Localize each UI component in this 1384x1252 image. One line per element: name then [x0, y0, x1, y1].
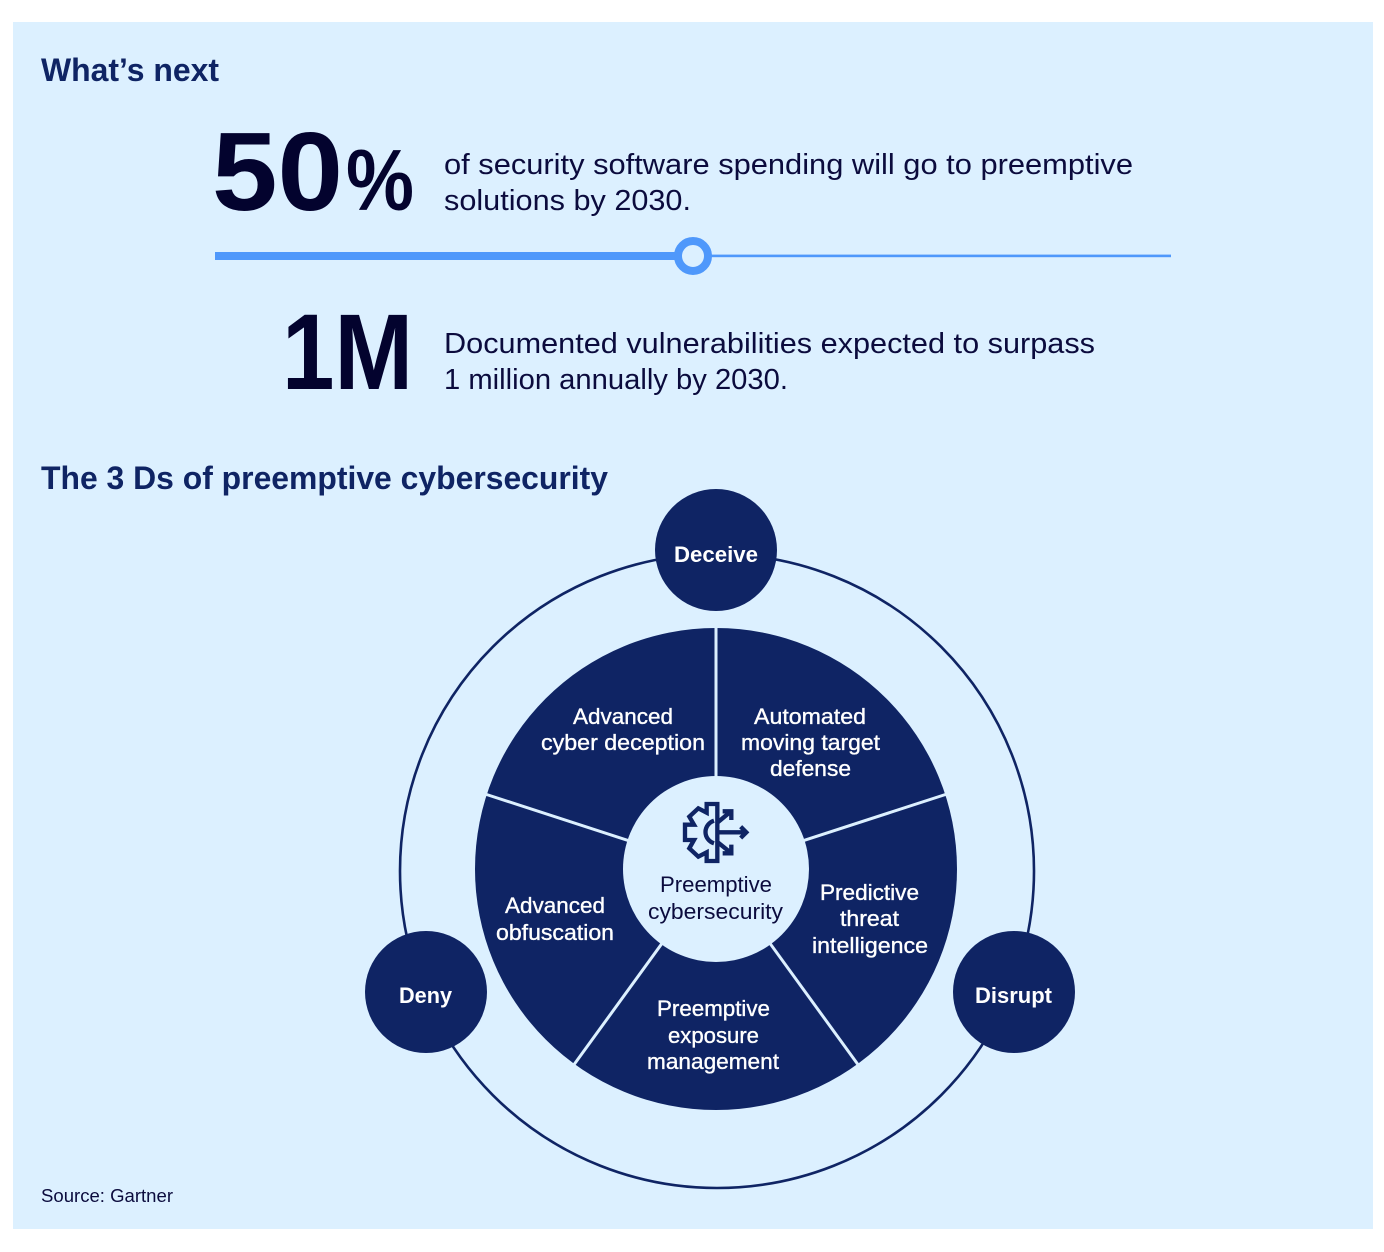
text: 50% description: solutions by 2030. — [444, 185, 691, 217]
label: Preemptive exposure management: Preemptive — [657, 996, 770, 1021]
stat: 50%: % — [346, 133, 414, 229]
label: Preemptive exposure management: exposure — [668, 1023, 759, 1048]
outer ring — [400, 554, 1034, 1188]
heading: What's next: What’s next — [41, 52, 219, 88]
label: center: Preemptive — [660, 872, 772, 897]
source note: Source: Gartner — [41, 1186, 173, 1206]
label: Predictive threat intelligence: Predictive — [820, 880, 919, 905]
node: Disrupt — [953, 931, 1075, 1053]
label: Automated moving target defense: moving target — [741, 730, 880, 755]
center circle — [623, 776, 809, 962]
label: Predictive threat intelligence — [812, 880, 928, 958]
text: 50% description — [444, 149, 1133, 217]
node: Deny — [365, 931, 487, 1053]
label: Advanced obfuscation: Advanced — [505, 893, 605, 918]
label: Preemptive exposure management — [647, 996, 779, 1074]
heading: The 3 Ds: The 3 Ds of preemptive cybersecurity — [41, 460, 608, 496]
stat: 1M: 1M — [282, 291, 413, 412]
text: 1M description: Documented vulnerabilities expected to surpass — [444, 328, 1095, 360]
label: center: cybersecurity — [648, 899, 783, 924]
label: Automated moving target defense: Automated — [754, 704, 866, 729]
text: 1M description: 1 million annually by 2030. — [444, 364, 788, 396]
label: Predictive threat intelligence: intelligence — [812, 933, 928, 958]
pie: five capabilities — [475, 626, 957, 1110]
node: Disrupt: Disrupt — [975, 983, 1053, 1008]
diagram: 3 Ds wheel — [365, 489, 1075, 1188]
stat: 50%: 50 — [212, 110, 343, 234]
label: Advanced cyber deception: Advanced — [573, 704, 673, 729]
label: Automated moving target defense: defense — [770, 756, 851, 781]
text: 1M description — [444, 328, 1095, 396]
stat: 50% — [212, 110, 414, 234]
node: Deny: Deny — [399, 983, 453, 1008]
node: Deceive — [655, 489, 777, 611]
icon: gear with arrows — [685, 804, 746, 861]
slider: progress line with marker — [215, 241, 1171, 271]
label: center — [648, 872, 783, 924]
node: Deceive: Deceive — [674, 542, 758, 567]
label: Advanced cyber deception: cyber deception — [541, 730, 705, 755]
label: Predictive threat intelligence: threat — [840, 906, 899, 931]
label: Advanced obfuscation: obfuscation — [496, 920, 614, 945]
label: Automated moving target defense — [741, 704, 880, 781]
label: Preemptive exposure management: management — [647, 1049, 779, 1074]
label: Advanced cyber deception — [541, 704, 705, 755]
label: Advanced obfuscation — [496, 893, 614, 945]
text: 50% description: of security software spending will go to preemptive — [444, 149, 1133, 181]
